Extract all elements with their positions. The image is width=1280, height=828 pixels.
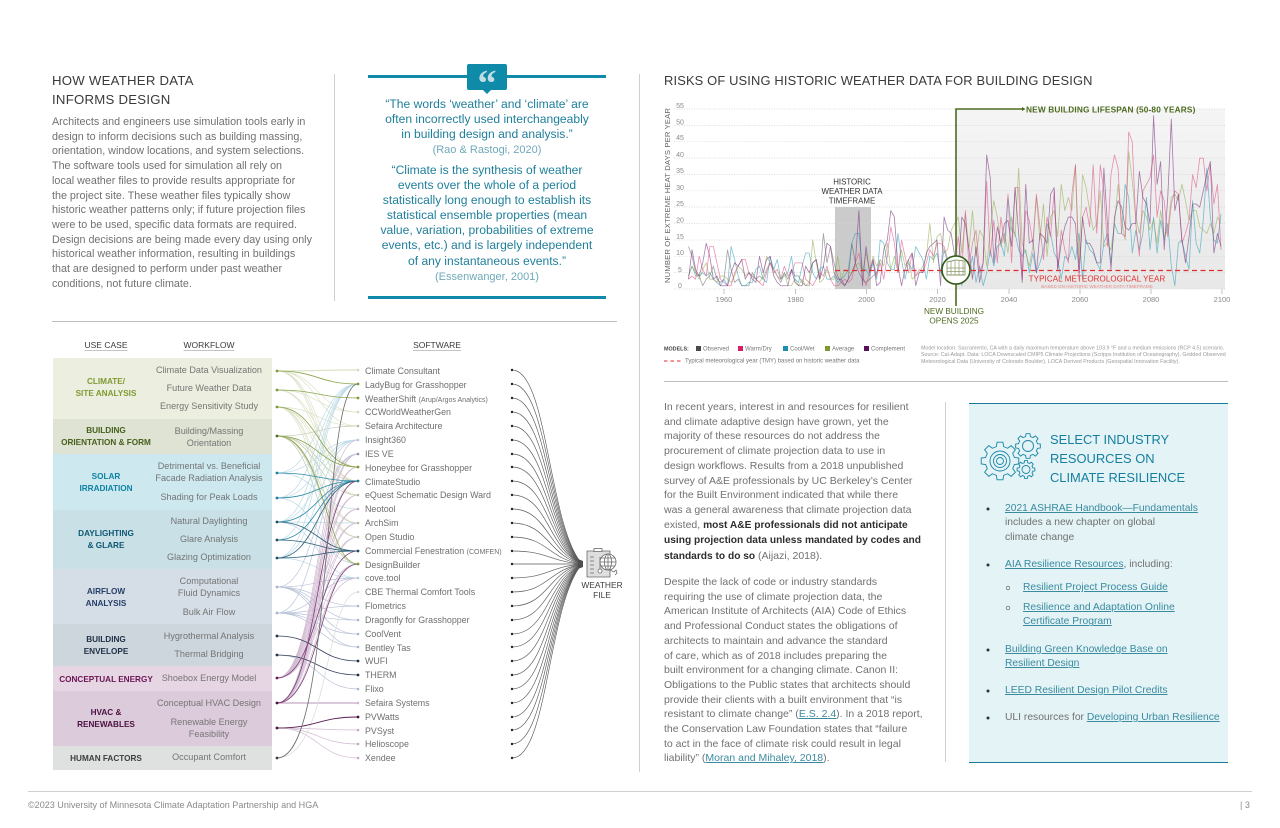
list: software tools: Helioscope xyxy=(365,739,409,749)
list: software tools: CoolVent xyxy=(365,629,401,639)
label: daylighting xyxy=(78,529,134,550)
list: software tools: Climate Consultant xyxy=(365,366,440,376)
annotation: building lifespan: NEW BUILDING LIFESPAN (50-80 YEARS) xyxy=(1026,104,1196,114)
series: average xyxy=(688,152,1221,286)
text block: intro paragraph: conditions, not future climate. xyxy=(52,278,192,290)
list: software tools: THERM xyxy=(365,670,397,680)
text block: intro paragraph: the project site. These weather files typically show xyxy=(52,190,290,202)
text block: intro paragraph: Design decisions are being made every day using only xyxy=(52,234,312,246)
list: software tools: cove.tool xyxy=(365,573,401,583)
heading: how weather data informs design: HOW WEATHER DATA xyxy=(52,73,194,88)
text block: body paragraph two: to act in the face of climate risk could result in legal xyxy=(664,738,901,750)
workflow labels: Feasibility xyxy=(189,728,229,738)
label: solar irradiation xyxy=(79,472,133,492)
label: weather file: FILE xyxy=(593,590,611,600)
label: human factors: HUMAN FACTORS xyxy=(70,754,142,763)
left nodes xyxy=(276,370,278,759)
resource: Building Green: Building Green Knowledge Base on xyxy=(1005,644,1168,655)
label: daylighting: DAYLIGHTING xyxy=(78,529,134,538)
y-axis labels: 50 xyxy=(676,120,684,126)
annotation: historic timeframe: HISTORIC xyxy=(833,178,871,186)
label: envelope: ENVELOPE xyxy=(84,646,128,656)
annotation: opens 2025: OPENS 2025 xyxy=(929,316,979,326)
workflow labels: Hygrothermal Analysis xyxy=(164,631,254,641)
text block: intro paragraph: The software tools used for simulation all rely on xyxy=(52,160,282,172)
resource: AIA: AIA Resilience Resources, including: xyxy=(1005,559,1173,570)
text block: body paragraph one: design workflows. Results from a 2018 unpublished xyxy=(664,460,903,472)
legend xyxy=(664,346,905,364)
label: daylighting: & GLARE xyxy=(88,540,124,550)
heading: select industry resources: CLIMATE RESILIENCE xyxy=(1050,470,1185,485)
series: complement xyxy=(688,116,1221,286)
text block: body paragraph one: standards to do so (Aijazi, 2018). xyxy=(664,550,822,562)
label: envelope: BUILDING xyxy=(86,635,126,644)
workflow labels: Orientation xyxy=(187,438,231,448)
heading: software: SOFTWARE xyxy=(413,340,461,350)
list: software tools: Open Studio xyxy=(365,532,414,542)
label: climate site analysis: CLIMATE/ xyxy=(87,377,125,386)
quote: Rao and Rastogi: (Rao & Rastogi, 2020) xyxy=(433,144,541,156)
workflow labels: Climate Data Visualization xyxy=(156,365,262,375)
label: envelope xyxy=(84,635,128,656)
legend: Typical meteorological year (TMY) based on historic weather data xyxy=(685,358,860,364)
chart source note: Meteorological Data (University of Colorado Boulder), LOCA Derived Products (Geospatial Innovation Facility). xyxy=(921,359,1180,365)
chart source note xyxy=(921,346,1226,365)
text block: intro paragraph: design to inform decisions such as building massing, xyxy=(52,131,302,143)
legend: Cool/Wet xyxy=(790,346,815,352)
quote: Essenwanger: statistically long enough to establish its xyxy=(383,193,591,207)
text block: body paragraph two xyxy=(664,576,923,764)
list: software tools: WeatherShift (Arup/Argos Analytics) xyxy=(365,394,488,404)
y-axis labels: 10 xyxy=(676,250,684,257)
heading: how weather data informs design xyxy=(52,73,194,107)
label: weather file: WEATHER xyxy=(581,580,623,590)
list: software tools: Commercial Fenestration (COMFEN) xyxy=(365,546,502,556)
label: solar irradiation: IRRADIATION xyxy=(79,484,133,492)
workflow labels: Facade Radiation Analysis xyxy=(155,472,263,482)
quote: Essenwanger: of any instantaneous events.” xyxy=(408,254,566,268)
workflow labels: Glare Analysis xyxy=(180,534,238,544)
text block: body paragraph one: for the Built Environment indicated that while there xyxy=(664,489,898,501)
legend: Warm/Dry xyxy=(745,346,772,352)
label: climate site analysis: SITE ANALYSIS xyxy=(76,388,136,398)
heading: select industry resources: RESOURCES ON xyxy=(1050,451,1155,466)
list: software tools: CCWorldWeatherGen xyxy=(365,407,451,417)
resource: AIA certificate xyxy=(1023,602,1175,627)
text block: intro paragraph: that are designed to perform under past weather xyxy=(52,263,282,275)
x-axis labels: 1980 xyxy=(787,295,804,304)
workflow labels: Occupant Comfort xyxy=(172,752,246,762)
list: software tools: Dragonfly for Grasshopper xyxy=(365,615,470,625)
annotation: opens 2025: NEW BUILDING xyxy=(924,307,984,316)
quote: Essenwanger: value, variation, probabilities of extreme xyxy=(380,223,594,237)
label: climate site analysis xyxy=(76,377,136,398)
y-axis labels: 0 xyxy=(678,283,682,290)
text block: body paragraph two: architects to maintain and advance the standard xyxy=(664,635,888,647)
footer: page number: | 3 xyxy=(1240,800,1250,810)
y-axis labels: 5 xyxy=(678,267,682,274)
quote: Essenwanger: (Essenwanger, 2001) xyxy=(435,271,539,283)
bullets xyxy=(986,508,1010,720)
list: software tools: Neotool xyxy=(365,504,396,514)
annotation: historic timeframe: WEATHER DATA xyxy=(822,187,883,196)
chart source note: Source: Cal-Adapt. Data: LOCA Downscaled CMIP5 Climate Projections (Scripps Institution of Oceanography), Gridded Observed xyxy=(921,352,1226,358)
heading: how weather data informs design: INFORMS DESIGN xyxy=(52,92,171,107)
chart source note: Model location: Sacramento, CA with a daily maximum temperature above 103.9 °F and a medium emissions (RCP 4.5) scenario. xyxy=(921,346,1224,352)
label: HVAC: RENEWABLES xyxy=(77,720,135,728)
legend: Observed xyxy=(703,346,729,352)
label: building orientation xyxy=(61,426,151,446)
text block: intro paragraph: local weather files to provide results appropriate for xyxy=(52,175,295,187)
icon: new building xyxy=(942,256,970,284)
quote: Rao and Rastogi: in building design and analysis.” xyxy=(401,127,573,141)
right nodes xyxy=(357,369,359,759)
workflow labels: Natural Daylighting xyxy=(171,516,247,526)
list: software tools: IES VE xyxy=(365,449,394,459)
list: software tools: Bentley Tas xyxy=(365,643,411,653)
y-axis labels: 45 xyxy=(676,135,684,142)
TMY dashed line xyxy=(835,270,1225,272)
label: HVAC: HVAC & xyxy=(91,708,121,717)
workflow labels: Fluid Dynamics xyxy=(178,588,240,598)
text block: body paragraph two: Obligations to the Public states that architects should xyxy=(664,679,910,691)
text block: body paragraph two: liability” (Moran and Mihaley, 2018). xyxy=(664,752,830,764)
icon: gears xyxy=(980,433,1041,480)
label: airflow xyxy=(86,587,126,608)
label: HVAC xyxy=(77,708,135,728)
text block: body paragraph two: American Institute of Architects (AIA) Code of Ethics xyxy=(664,605,906,617)
workflow labels: Energy Sensitivity Study xyxy=(160,401,258,411)
text block: body paragraph two: requiring the use of climate projection data, the xyxy=(664,591,882,603)
series: warm dry xyxy=(688,132,1221,286)
label: weather file xyxy=(581,580,623,600)
list: software tools: DesignBuilder xyxy=(365,560,420,570)
list: software tools: ArchSim xyxy=(365,518,399,528)
quote: Rao and Rastogi: “The words ‘weather’ and ‘climate’ are xyxy=(385,97,589,111)
list: software tools: Flixo xyxy=(365,684,384,694)
resource: LEED: LEED Resilient Design Pilot Credits xyxy=(1005,685,1168,696)
annotation: opens 2025 xyxy=(924,307,984,326)
workflow labels: Detrimental vs. Beneficial xyxy=(158,461,260,471)
annotation: historic timeframe xyxy=(822,178,883,206)
y-axis labels: 35 xyxy=(676,168,684,175)
text block: body paragraph two: Despite the lack of code or industry standards xyxy=(664,576,877,588)
text block: body paragraph one: existed, most A&E professionals did not anticipate xyxy=(664,519,908,531)
resource: ASHRAE: includes a new chapter on global xyxy=(1005,517,1155,528)
y-axis labels: 25 xyxy=(676,201,684,208)
label: airflow: ANALYSIS xyxy=(86,598,126,608)
workflow labels: Conceptual HVAC Design xyxy=(157,698,261,708)
text block: intro paragraph: historical weather information, resulting in buildings xyxy=(52,248,295,260)
text block: intro paragraph: Architects and engineers use simulation tools early in xyxy=(52,116,305,128)
data series xyxy=(688,116,1221,286)
legend: Average xyxy=(832,346,855,352)
text block: body paragraph one xyxy=(664,401,921,562)
text block: body paragraph one: In recent years, interest in and resources for resilient xyxy=(664,401,909,413)
panel: quotes xyxy=(368,63,606,96)
list: software tools: Insight360 xyxy=(365,435,406,445)
workflow labels: Shading for Peak Loads xyxy=(160,492,258,502)
text block: body paragraph two: provide their clients with a built environment that “is xyxy=(664,694,902,706)
list: software tools: Xendee xyxy=(365,753,396,763)
text block: intro paragraph: orientation, window locations, and system selections. xyxy=(52,145,304,157)
quote: Essenwanger: events, etc.) and is largely independent xyxy=(382,238,592,252)
resource: AIA process guide: Resilient Project Process Guide xyxy=(1023,582,1168,593)
annotation: typical meteorological year xyxy=(1029,274,1165,289)
list: software tools: Sefaira Architecture xyxy=(365,421,442,431)
quote: Essenwanger xyxy=(380,163,594,283)
resource: Building Green xyxy=(1005,644,1168,669)
label: solar irradiation: SOLAR xyxy=(92,472,120,481)
y-axis labels: 30 xyxy=(676,185,684,192)
text block: body paragraph one: procurement of climate projection data to use in xyxy=(664,445,885,457)
text block: intro paragraph: historic weather patterns only; if future projection files xyxy=(52,204,305,216)
list: software tools: ClimateStudio xyxy=(365,477,420,487)
quote: Essenwanger: statistical ensemble properties (mean xyxy=(387,208,587,222)
workflow labels: Renewable Energy xyxy=(171,717,247,727)
workflow labels: Thermal Bridging xyxy=(174,649,244,659)
resource: AIA certificate: Resilience and Adaptation Online xyxy=(1023,602,1175,613)
text block: body paragraph one: survey of A&E professionals by UC Berkeley’s Center xyxy=(664,475,912,487)
workflow labels: Future Weather Data xyxy=(167,383,251,393)
workflow labels: Shoebox Energy Model xyxy=(162,673,256,683)
list: software tools: PVWatts xyxy=(365,712,399,722)
list: software tools: Honeybee for Grasshopper xyxy=(365,463,472,473)
quote: Rao and Rastogi: often incorrectly used interchangeably xyxy=(385,112,589,126)
label: airflow: AIRFLOW xyxy=(87,587,125,596)
resource: ASHRAE: climate change xyxy=(1005,532,1074,543)
text block: body paragraph two: built environment for a changing climate. Canon II: xyxy=(664,664,898,676)
workflow labels: Bulk Air Flow xyxy=(183,607,235,617)
text block: body paragraph one: was a general awareness that climate projection data xyxy=(664,504,911,516)
workflow labels: Computational xyxy=(180,576,238,586)
quote: Essenwanger: “Climate is the synthesis of weather xyxy=(392,163,582,177)
resource: AIA certificate: Certificate Program xyxy=(1023,616,1112,627)
list: software tools: Sefaira Systems xyxy=(365,698,430,708)
resource: ASHRAE: 2021 ASHRAE Handbook—Fundamentals xyxy=(1005,503,1198,514)
heading: select industry resources: SELECT INDUSTRY xyxy=(1050,432,1169,447)
y-axis labels: 40 xyxy=(676,152,684,159)
workflow labels xyxy=(155,365,263,762)
y-axis labels: 15 xyxy=(676,234,684,241)
label: building orientation: ORIENTATION & FORM xyxy=(61,438,151,446)
y-axis title: NUMBER OF EXTREME HEAT DAYS PER YEAR xyxy=(663,108,672,283)
text block: body paragraph two: resistant to climate change” (E.S. 2.4). In a 2018 report, xyxy=(664,708,923,720)
resource: ASHRAE xyxy=(1005,503,1198,543)
x-axis labels: 2020 xyxy=(929,295,946,304)
y-axis labels: 20 xyxy=(676,218,684,224)
annotation: building lifespan xyxy=(956,104,1196,306)
quote: Essenwanger: events over the whole of a period xyxy=(398,178,576,192)
y-axis labels xyxy=(676,103,684,290)
workflow labels: Building/Massing xyxy=(175,426,243,436)
annotation: typical meteorological year: TYPICAL METEOROLOGICAL YEAR xyxy=(1029,274,1165,284)
panel: industry resources xyxy=(969,403,1228,763)
annotation: typical meteorological year: BASED ON HISTORIC WEATHER DATA TIMEFRAME xyxy=(1041,284,1153,289)
heading: risks chart: RISKS OF USING HISTORIC WEATHER DATA FOR BUILDING DESIGN xyxy=(664,73,1093,88)
legend: Complement xyxy=(871,346,905,352)
icon: quotation mark bubble xyxy=(368,63,606,96)
annotation: historic timeframe: TIMEFRAME xyxy=(829,196,875,206)
x-axis labels: 2100 xyxy=(1214,295,1230,304)
x-axis labels: 1960 xyxy=(716,295,732,304)
label: conceptual energy: CONCEPTUAL ENERGY xyxy=(59,675,153,684)
text block: intro paragraph: were to be used, specific data formats are required. xyxy=(52,219,297,231)
text block: body paragraph two: the Conservation Law Foundation states that “failure xyxy=(664,723,907,735)
text block: body paragraph one: and climate adaptive design have grown, yet the xyxy=(664,416,889,428)
quote: Rao and Rastogi xyxy=(385,97,589,156)
list: software tools: WUFI xyxy=(365,656,388,666)
list: software tools: Flometrics xyxy=(365,601,406,611)
x-axis labels: 2000 xyxy=(858,295,875,304)
text block: body paragraph one: using projection data unless mandated by codes and xyxy=(664,535,921,546)
y-axis labels: 55 xyxy=(676,103,684,110)
text block: intro paragraph xyxy=(52,116,312,290)
legend: MODELS: xyxy=(664,346,689,352)
heading: select industry resources xyxy=(1050,432,1185,485)
label: building orientation: BUILDING xyxy=(86,426,126,435)
series: observed xyxy=(688,233,880,286)
x-axis labels: 2060 xyxy=(1072,295,1088,304)
resource: ULI: ULI resources for Developing Urban Resilience xyxy=(1005,712,1220,723)
table: use case and workflow xyxy=(53,340,272,770)
workflow labels: Glazing Optimization xyxy=(167,552,251,562)
list: software tools xyxy=(365,366,502,763)
list: software tools: eQuest Schematic Design Ward xyxy=(365,490,491,500)
resource: Building Green: Resilient Design xyxy=(1005,658,1079,669)
list: software tools: LadyBug for Grasshopper xyxy=(365,380,467,390)
x-axis labels: 2040 xyxy=(1001,295,1017,304)
x-axis labels: 2080 xyxy=(1143,295,1159,304)
text block: body paragraph one: majority of these resources do not address the xyxy=(664,430,880,442)
x-axis labels xyxy=(716,295,1230,304)
heading: workflow: WORKFLOW xyxy=(184,340,234,350)
text block: body paragraph two: and Professional Conduct states the obligations of xyxy=(664,620,897,632)
list: software tools: CBE Thermal Comfort Tools xyxy=(365,587,475,597)
footer: copyright: ©2023 University of Minnesota Climate Adaptation Partnership and HGA xyxy=(28,800,318,810)
text block: body paragraph two: of care, which as of 2018 includes preparing the xyxy=(664,650,887,662)
heading: use case: USE CASE xyxy=(84,340,128,350)
series: cool wet xyxy=(688,168,1221,286)
list: software tools: PVSyst xyxy=(365,726,394,736)
